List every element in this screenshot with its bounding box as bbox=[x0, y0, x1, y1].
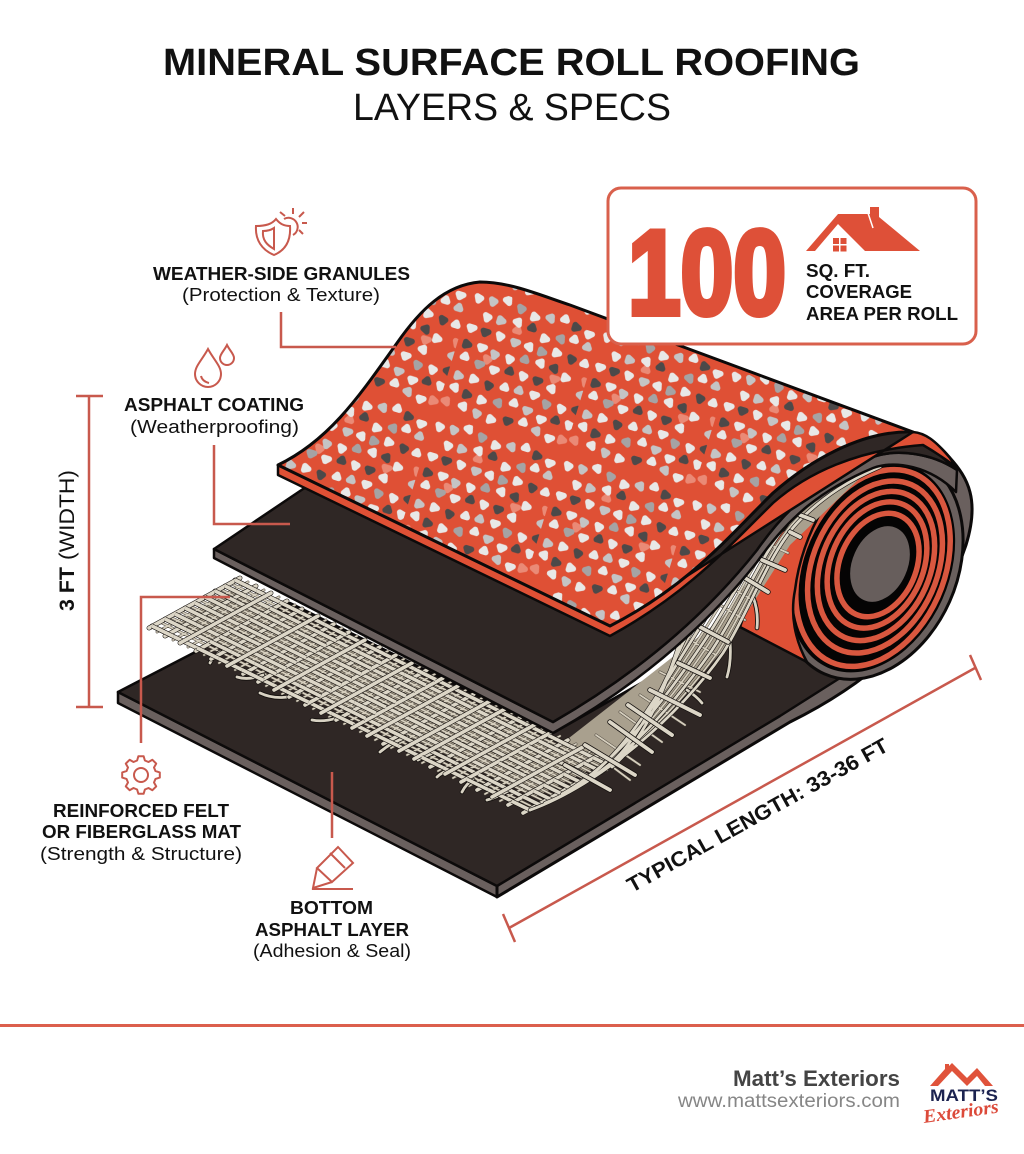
exposed inner red side of the roll bbox=[740, 497, 830, 662]
dimension: 3 ft width bbox=[56, 396, 103, 707]
bottom asphalt sheet surface bbox=[118, 603, 840, 886]
footer logo: Exteriors bbox=[921, 1097, 1000, 1128]
label: asphalt coating: (Weatherproofing) bbox=[130, 417, 299, 437]
reinforced felt or fiberglass mat bbox=[149, 465, 880, 813]
dimension: typical length: TYPICAL LENGTH: 33-36 FT bbox=[623, 734, 893, 897]
label: reinforced felt or fiberglass mat: (Strength & Structure) bbox=[40, 844, 242, 864]
label: asphalt coating bbox=[124, 345, 304, 437]
footer company name and website bbox=[677, 1066, 900, 1112]
label: weather-side granules: (Protection & Texture) bbox=[182, 285, 380, 305]
label: reinforced felt or fiberglass mat bbox=[40, 756, 242, 864]
large number 100: 100 bbox=[628, 206, 786, 340]
footer logo: MATT’S bbox=[930, 1086, 998, 1105]
roofing roll illustration bbox=[118, 282, 997, 897]
footer logo bbox=[921, 1063, 1000, 1128]
coverage text bbox=[806, 261, 958, 324]
icon: gear bbox=[122, 756, 160, 794]
footer company name and website: www.mattsexteriors.com bbox=[677, 1091, 900, 1112]
coverage text: AREA PER ROLL bbox=[806, 304, 958, 324]
logo roofs bbox=[930, 1063, 993, 1086]
label: asphalt coating: ASPHALT COATING bbox=[124, 395, 304, 415]
weather-side granule surface bbox=[278, 282, 913, 626]
leader line: granules bbox=[281, 312, 396, 347]
title: LAYERS & SPECS bbox=[353, 87, 671, 129]
icon: water drops bbox=[195, 345, 234, 387]
title: MINERAL SURFACE ROLL ROOFING bbox=[163, 42, 860, 84]
icon: shield and sun bbox=[256, 208, 307, 255]
icon: adhesive tube bbox=[312, 847, 353, 889]
icon: house roof bbox=[806, 207, 920, 252]
dimension: typical length bbox=[503, 655, 981, 942]
leader line: bottom asphalt bbox=[331, 772, 333, 838]
coverage text: COVERAGE bbox=[806, 282, 912, 302]
asphalt coating side edge bbox=[214, 453, 957, 733]
roll outer wrap bbox=[497, 432, 972, 897]
dimension: 3 ft width: (WIDTH) bbox=[56, 470, 79, 560]
dimension: 3 ft width: 3 FT bbox=[56, 567, 79, 611]
label: reinforced felt or fiberglass mat: OR FIBERGLASS MAT bbox=[42, 822, 241, 842]
bottom asphalt sheet side edge bbox=[118, 692, 497, 897]
asphalt coating layer bbox=[214, 400, 957, 722]
footer company name and website: Matt’s Exteriors bbox=[733, 1066, 900, 1091]
rolled end with spiral layers bbox=[747, 426, 997, 708]
label: bottom asphalt layer: (Adhesion & Seal) bbox=[253, 941, 411, 961]
callout: coverage area bbox=[608, 188, 976, 344]
footer divider bbox=[0, 1024, 1024, 1027]
coverage text: SQ. FT. bbox=[806, 261, 870, 281]
label: bottom asphalt layer: ASPHALT LAYER bbox=[255, 920, 409, 940]
label: weather-side granules bbox=[153, 208, 410, 305]
title bbox=[163, 42, 860, 129]
label: bottom asphalt layer bbox=[253, 847, 411, 961]
label: bottom asphalt layer: BOTTOM bbox=[290, 898, 373, 918]
label: reinforced felt or fiberglass mat: REINFORCED FELT bbox=[53, 801, 229, 821]
top sheet red edge band bbox=[278, 432, 957, 636]
label: weather-side granules: WEATHER-SIDE GRANULES bbox=[153, 264, 410, 284]
leader line: asphalt coating bbox=[214, 445, 290, 524]
leader line: fiberglass mat bbox=[141, 597, 230, 743]
